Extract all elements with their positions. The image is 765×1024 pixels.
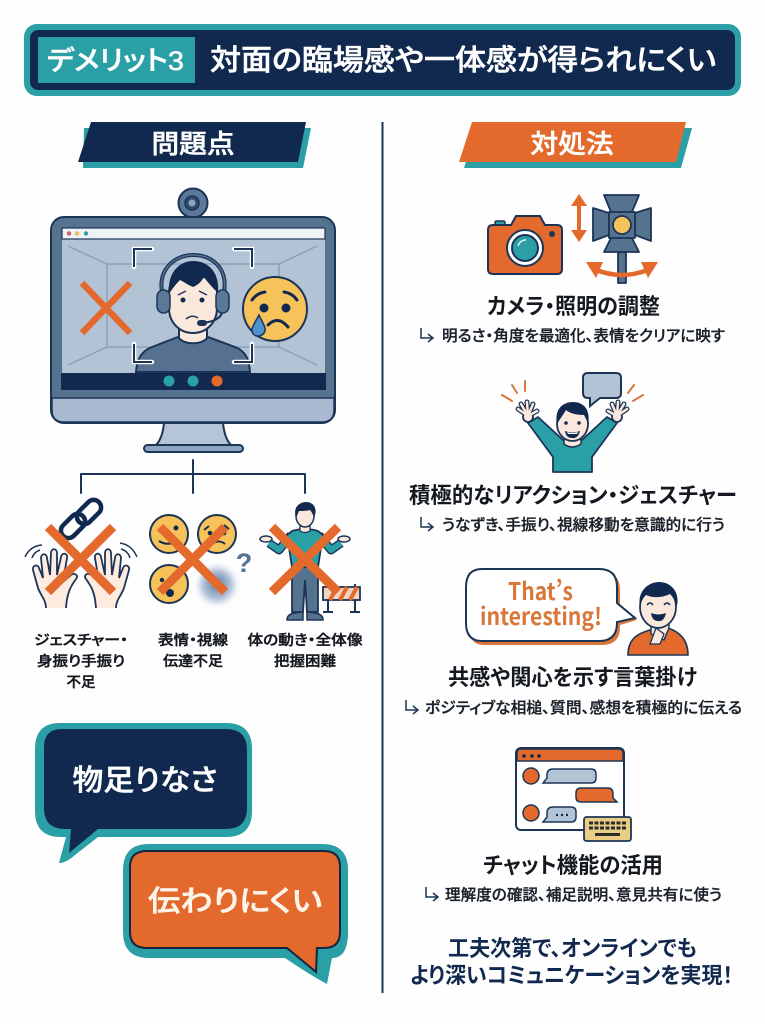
monitor body xyxy=(51,217,335,423)
header tag: demerit 3 xyxy=(38,37,195,83)
panel: problem 2 expressions xyxy=(150,515,252,669)
panel: solution 2 reactions xyxy=(409,373,737,534)
icon: chat window xyxy=(516,748,624,830)
icon: curved arrow xyxy=(586,262,658,278)
icon: vertical arrow xyxy=(571,194,587,242)
heading: solutions: 対処法 xyxy=(530,129,614,159)
detail: ポジティブな相槌、質問、感想を積極的に伝える xyxy=(425,698,742,717)
header title: 対面の臨場感や一体感が得られにくい xyxy=(210,44,716,77)
icon: road barrier xyxy=(323,584,360,612)
speech bubble: that's interesting: That’s xyxy=(508,572,573,607)
title: 積極的なリアクション・ジェスチャー xyxy=(409,483,737,508)
stand xyxy=(156,423,231,445)
call control bar xyxy=(61,373,326,390)
closing message: より深いコミュニケーションを実現！ xyxy=(410,963,733,988)
icon: keyboard xyxy=(584,817,631,841)
heading: problems: 問題点 xyxy=(152,129,234,159)
speech bubble: hard to convey: 伝わりにくい xyxy=(148,885,322,918)
speech bubble: lacking: 物足りなさ xyxy=(72,764,218,797)
heading: solutions xyxy=(459,122,692,168)
icon: crying emoji xyxy=(243,277,307,341)
header banner xyxy=(24,24,741,96)
icon: chat bubble xyxy=(583,373,621,406)
icon: broken link xyxy=(58,497,104,541)
detail: うなずき、手振り、視線移動を意識的に行う xyxy=(442,516,725,534)
heading: problems xyxy=(78,122,311,168)
label: 把握困難 xyxy=(274,653,336,669)
icon: cheering person xyxy=(518,402,627,472)
label xyxy=(158,632,228,669)
label: 伝達不足 xyxy=(163,653,223,669)
speech bubble: lacking xyxy=(35,723,252,863)
person with headset xyxy=(136,255,250,372)
cross xyxy=(48,527,113,592)
panel: solution 4 chat xyxy=(426,748,722,904)
label: 体の動き・全体像 xyxy=(248,632,362,648)
speech bubble: that's interesting: interesting! xyxy=(480,597,602,632)
orange cross xyxy=(82,283,130,333)
label: 不足 xyxy=(66,674,96,690)
label: ジェスチャー・ xyxy=(34,632,128,648)
icon: standing person xyxy=(260,502,350,620)
question mark: ? xyxy=(236,548,252,578)
connector lines xyxy=(81,460,305,493)
icon: webcam xyxy=(178,188,208,223)
focus brackets xyxy=(134,249,252,362)
panel: solution 1 camera and lighting xyxy=(421,194,725,345)
label: 身振り手振り xyxy=(37,653,125,669)
speech bubble: hard to convey xyxy=(123,844,348,984)
title: 共感や関心を示す言葉掛け xyxy=(448,665,697,690)
title: カメラ・照明の調整 xyxy=(487,294,660,319)
screen xyxy=(62,228,325,373)
icon: emoji group xyxy=(150,515,252,603)
cross xyxy=(160,527,225,592)
closing message: 工夫次第で、オンラインでも xyxy=(448,936,697,961)
icon: camera xyxy=(488,216,562,274)
label xyxy=(34,632,128,690)
detail: 理解度の確認、補足説明、意見共有に使う xyxy=(445,886,722,904)
speech bubble: that's interesting xyxy=(466,569,637,645)
closing message xyxy=(410,936,733,988)
icon: hands xyxy=(25,543,137,608)
icon: sparkle rays xyxy=(502,381,643,401)
icon: smiling person xyxy=(628,582,688,655)
label xyxy=(248,632,362,669)
icon: desktop monitor with sad video call xyxy=(51,188,335,452)
panel: problem 3 body movement xyxy=(248,502,362,669)
header tag: demerit 3: デメリット3 xyxy=(47,46,184,76)
title: チャット機能の活用 xyxy=(483,853,663,878)
label: 表情・視線 xyxy=(158,632,228,648)
icon: studio light xyxy=(593,195,651,283)
panel: solution 3 empathetic words xyxy=(406,569,742,717)
cross xyxy=(272,527,338,592)
detail: 明るさ・角度を最適化、表情をクリアに映す xyxy=(442,327,725,345)
panel: problem 1 gestures xyxy=(25,497,137,690)
